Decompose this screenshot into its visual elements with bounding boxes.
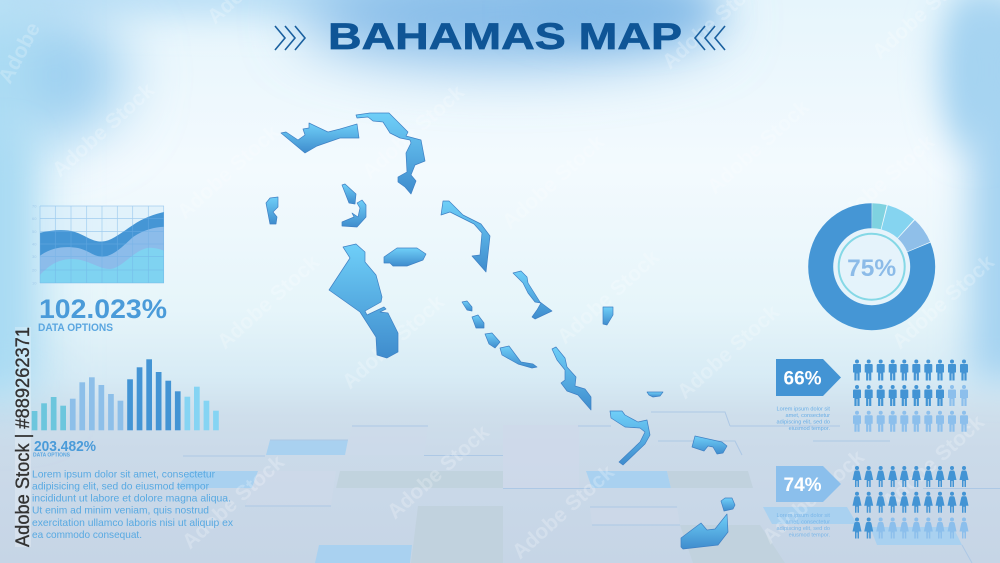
watermarks: Adobe Stock	[213, 251, 324, 354]
watermarks: Adobe Stock	[673, 301, 784, 404]
text block: 74% caption: eiusmod tempor.	[789, 532, 830, 538]
axis labels: 30	[32, 254, 37, 259]
axis labels: 70	[32, 204, 37, 208]
watermarks: Adobe Stock	[498, 131, 609, 234]
text block: 74% caption: Lorem ipsum dolor sit	[777, 513, 830, 519]
text block: lorem ipsum: adipisicing elit, sed do eiusmod tempor	[32, 480, 209, 492]
island: Great Inagua	[681, 514, 728, 549]
text block: 66% caption: eiusmod tempor.	[789, 426, 830, 432]
figure: 102.023%: 102.023%	[39, 294, 167, 324]
callout: 74%: 74%	[784, 475, 822, 496]
label: data options small: DATA OPTIONS	[33, 452, 71, 458]
island: Exuma chain 1	[462, 301, 472, 311]
island: Grand Bahama	[281, 123, 359, 153]
text block: lorem ipsum	[32, 468, 234, 541]
watermarks: Adobe Stock	[178, 451, 289, 554]
bar chart	[32, 359, 219, 430]
icon: right chevrons	[695, 26, 725, 50]
text block: 66% caption: Lorem ipsum dolor sit	[777, 406, 830, 412]
island: Cat	[513, 271, 552, 319]
axis labels	[32, 204, 37, 286]
pictogram: men	[853, 360, 968, 432]
pictogram: women	[852, 466, 968, 538]
chart areas	[40, 206, 164, 283]
watermarks: Adobe Stock	[758, 446, 869, 549]
island: Exuma chain 2	[472, 315, 484, 328]
axis labels: 50	[32, 229, 37, 234]
donut value: 75%	[847, 255, 896, 282]
heading text: BAHAMAS MAP	[328, 16, 682, 57]
island: Abaco	[356, 113, 425, 194]
donut chart	[821, 216, 923, 318]
figure: 203.482%: 203.482%	[34, 439, 96, 455]
floor tiles	[176, 412, 1000, 563]
callout: 74%	[776, 466, 841, 502]
axis labels: 40	[32, 242, 37, 246]
text block: 66% caption	[776, 406, 830, 432]
text block: lorem ipsum: Lorem ipsum dolor sit amet, consectetur	[32, 468, 215, 480]
island: Exuma chain 3	[485, 333, 500, 348]
stock id strip: Adobe Stock | #889262371	[13, 327, 34, 547]
text block: lorem ipsum: incididunt ut labore et dolore magna aliqua.	[32, 493, 231, 505]
text block: lorem ipsum: ea commodo consequat.	[32, 529, 142, 541]
island: Andros	[329, 244, 398, 358]
watermarks: Adobe Stock	[888, 251, 999, 354]
text block: 66% caption: adipiscing elit, sed do	[776, 420, 830, 426]
axis labels: 20	[32, 268, 37, 272]
panel: area chart	[32, 204, 164, 286]
island: Rum Cay	[647, 392, 663, 397]
watermarks: Adobe Stock	[383, 421, 494, 524]
axis labels: 10	[32, 280, 37, 286]
island: Bimini	[266, 197, 278, 224]
text block: 74% caption: adipiscing elit, sed do	[776, 526, 830, 532]
island: Exuma chain 4	[500, 346, 537, 368]
watermarks: Adobe Stock	[878, 411, 989, 514]
text block: lorem ipsum: exercitation ullamco laboris nisi ut aliquip ex	[32, 517, 234, 529]
label: data options: DATA OPTIONS	[38, 322, 113, 334]
axis labels: 60	[32, 216, 37, 221]
island: Crooked	[610, 411, 650, 465]
title	[275, 16, 725, 57]
island: Little Inagua	[721, 498, 735, 511]
text block: lorem ipsum: Ut enim ad minim veniam, quis nostrud	[32, 505, 209, 517]
island: Long	[552, 347, 591, 410]
island: Berry	[342, 184, 356, 204]
map of the Bahamas	[266, 113, 735, 549]
icon: left chevrons	[275, 26, 305, 50]
callout: 66%	[776, 359, 841, 396]
island: Joulter	[342, 200, 366, 227]
island: New Providence	[384, 248, 426, 266]
text block: 66% caption: amet, consectetur	[786, 413, 830, 419]
watermarks: Adobe Stock	[828, 131, 939, 234]
watermarks: Adobe Stock	[703, 96, 814, 199]
watermarks: Adobe Stock	[338, 291, 449, 394]
watermarks: Adobe Stock	[553, 246, 664, 349]
watermarks: Adobe Stock	[173, 121, 284, 224]
text block: 74% caption	[776, 513, 830, 538]
chart grid	[40, 206, 164, 283]
watermarks: Adobe Stock	[508, 461, 619, 563]
island: San Salvador	[603, 307, 613, 325]
watermarks: Adobe Stock	[48, 79, 159, 182]
watermarks: Adobe Stock	[358, 81, 469, 184]
island: Eleuthera	[441, 201, 490, 272]
text block: 74% caption: amet, consectetur	[786, 520, 830, 526]
callout: 66%: 66%	[784, 368, 822, 390]
island: Mayaguana	[692, 436, 727, 454]
